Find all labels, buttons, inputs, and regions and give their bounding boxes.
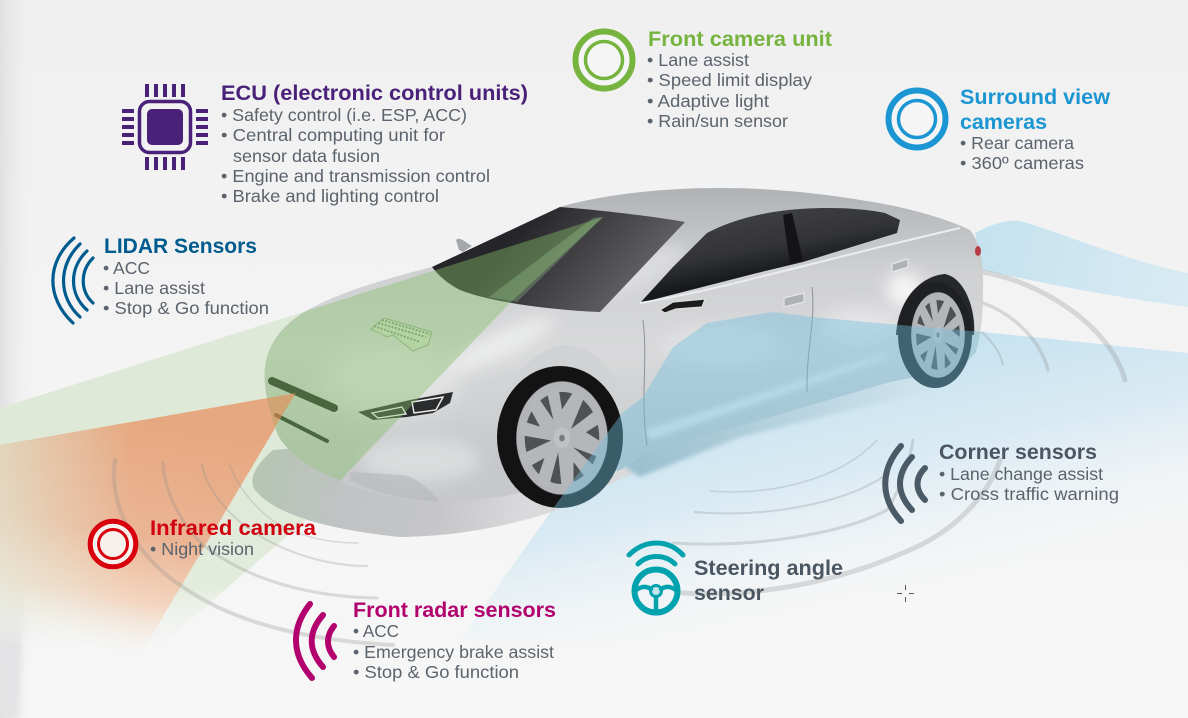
floor sensor rings	[114, 272, 1125, 645]
door handles	[784, 259, 908, 307]
heading: surround view	[960, 86, 1111, 134]
list: surround view functions: • Rear camera	[960, 133, 1074, 153]
beam: infrared orange field	[0, 398, 276, 640]
panel: surround view cameras	[888, 86, 1111, 173]
lower intake	[276, 415, 327, 441]
left mirror	[456, 239, 472, 252]
list: surround view functions	[960, 133, 1084, 173]
rear wheel	[896, 274, 974, 388]
list: infrared functions: • Night vision	[150, 539, 254, 559]
list: LIDAR functions: • ACC	[103, 258, 150, 278]
heading: steering angle sensor: Steering angle	[694, 557, 843, 580]
headlight	[358, 392, 453, 420]
heading: front radar: Front radar sensors	[353, 599, 556, 622]
list: front camera functions: • Rain/sun sensor	[647, 111, 788, 131]
icon: LIDAR waves	[53, 238, 93, 323]
heading: steering angle sensor	[694, 557, 843, 605]
ECU module	[371, 318, 432, 351]
list: LIDAR functions	[103, 258, 269, 318]
door mirror	[660, 299, 705, 313]
list: front camera functions: • Speed limit display	[647, 70, 812, 90]
window pillar	[783, 213, 803, 264]
panel: corner sensors	[885, 441, 1119, 521]
list: ECU functions: sensor data fusion	[233, 146, 380, 166]
list: front radar functions	[353, 621, 554, 682]
door seams	[640, 228, 960, 445]
heading: surround view: cameras	[960, 111, 1047, 134]
car body	[265, 188, 983, 503]
body highlights	[320, 236, 923, 482]
list: ECU functions: • Central computing unit for	[221, 125, 445, 145]
beam: rear blue sensor field	[975, 221, 1188, 307]
windshield	[432, 207, 685, 312]
lower bumper vent	[350, 472, 440, 502]
icon: corner waves	[885, 446, 925, 521]
beam: side blue sensor field	[460, 312, 1188, 660]
list: LIDAR functions: • Stop & Go function	[103, 298, 269, 318]
list: ECU functions: • Engine and transmission control	[221, 166, 490, 186]
list: surround view functions: • 360º cameras	[960, 153, 1084, 173]
list: front camera functions: • Lane assist	[647, 50, 749, 70]
panel: infrared camera	[90, 517, 316, 567]
panel: ECU	[122, 82, 528, 206]
car overlays: sensor tints	[264, 217, 980, 508]
list: front radar functions: • Stop & Go function	[353, 662, 519, 682]
heading: surround view: Surround view	[960, 86, 1111, 109]
list: LIDAR functions: • Lane assist	[103, 278, 205, 298]
list: ECU functions: • Brake and lighting control	[221, 186, 439, 206]
list: front camera functions	[647, 50, 812, 131]
list: ECU functions	[221, 105, 490, 206]
list: front radar functions: • ACC	[353, 621, 399, 641]
car shadow	[252, 365, 965, 537]
heading: infrared: Infrared camera	[150, 517, 316, 540]
icon: radar waves	[296, 604, 334, 678]
icon: red camera rings	[90, 521, 136, 567]
icon: green camera rings	[576, 32, 632, 88]
panel: steering angle sensor	[629, 543, 843, 612]
tail light	[975, 246, 981, 256]
heading: front camera: Front camera unit	[648, 28, 832, 51]
icon: blue camera rings	[888, 90, 946, 148]
heading: steering angle sensor: sensor	[694, 582, 764, 605]
heading: ECU: ECU (electronic control units)	[221, 82, 528, 105]
heading: corner sensors: Corner sensors	[939, 441, 1097, 464]
front wheel	[497, 345, 625, 508]
panel: LIDAR sensors	[53, 235, 269, 323]
icon: chip	[122, 84, 208, 170]
list: corner functions: • Cross traffic warning	[939, 484, 1119, 504]
panel: front camera unit	[576, 28, 832, 131]
icon: steering wheel with signal	[629, 543, 683, 612]
list: corner functions: • Lane change assist	[939, 464, 1103, 484]
beam: front camera green field	[0, 217, 603, 655]
car	[264, 188, 983, 508]
list: corner functions	[939, 464, 1119, 504]
grille	[272, 381, 334, 408]
cursor crosshair	[897, 585, 914, 602]
list: front camera functions: • Adaptive light	[647, 91, 769, 111]
heading: LIDAR: LIDAR Sensors	[104, 235, 257, 258]
side windows	[640, 208, 900, 303]
list: front radar functions: • Emergency brake assist	[353, 642, 554, 662]
list: ECU functions: • Safety control (i.e. ESP, ACC)	[221, 105, 467, 125]
panel: front radar sensors	[296, 599, 556, 682]
